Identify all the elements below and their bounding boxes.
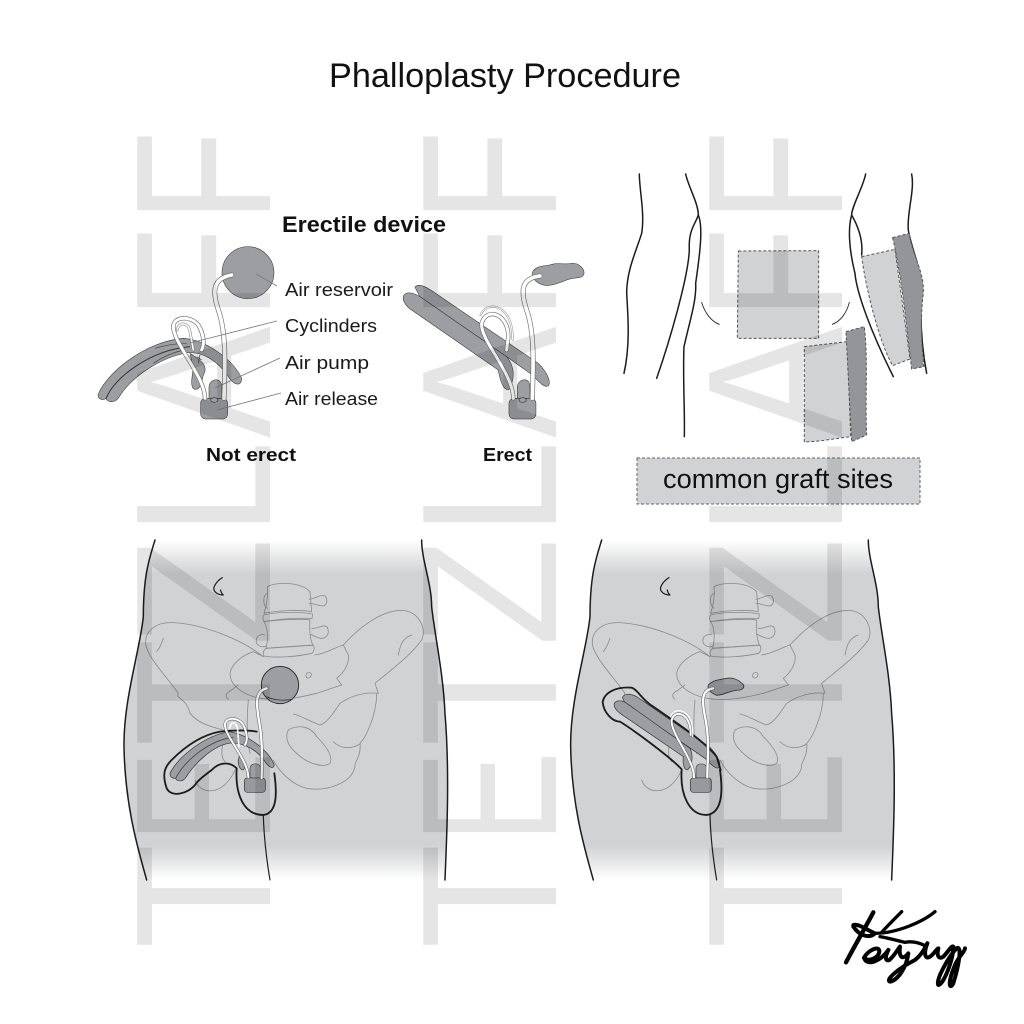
caption box: common graft sites — [663, 464, 893, 494]
panel: erectile device diagrams — [98, 212, 584, 465]
graft site: abdomen — [737, 251, 819, 338]
watermark: column 3: T — [668, 844, 883, 949]
heading: erectile device: Erectile device — [282, 212, 446, 237]
watermark: column 1 — [95, 131, 312, 949]
watermark: column 2: E — [381, 751, 597, 843]
watermark: column 3: E — [667, 751, 883, 843]
cylinder leg — [238, 753, 245, 770]
label: air release: Air release — [285, 389, 378, 409]
watermark: column 3: L — [668, 441, 883, 536]
graft site: upper arm — [862, 233, 924, 369]
release — [244, 778, 265, 792]
label: not erect: Not erect — [206, 444, 296, 465]
reservoir — [261, 666, 299, 704]
watermark: column 2: F — [381, 131, 597, 222]
watermark: column 3: T — [668, 638, 884, 747]
skin outline — [603, 688, 721, 815]
watermark: column 2: A — [382, 326, 598, 438]
graft site: lower forearm — [804, 327, 867, 442]
watermark: column 1: F — [95, 131, 311, 222]
tubes — [225, 688, 267, 778]
watermark: column 2: F — [381, 228, 597, 319]
tubes — [671, 688, 713, 777]
panel: common graft sites — [624, 174, 927, 504]
signature — [846, 912, 965, 986]
caption box — [637, 458, 920, 504]
watermark: column 2: T — [382, 638, 598, 747]
label: air reservoir: Air reservoir — [285, 280, 393, 300]
pump — [250, 764, 261, 781]
watermark: column 1: Z — [96, 538, 312, 646]
panel: pelvis with device, not erect — [124, 540, 448, 880]
leader lines — [190, 274, 281, 410]
device: erect — [403, 263, 584, 419]
cylinders — [170, 732, 274, 781]
panel: pelvis with device, erect — [571, 540, 894, 880]
title: Phalloplasty Procedure — [329, 57, 681, 95]
reservoir — [708, 678, 744, 695]
watermark: column 3: F — [667, 131, 883, 222]
release — [690, 778, 711, 792]
device: not erect — [98, 247, 274, 419]
label: erect: Erect — [483, 444, 532, 465]
cylinders — [614, 694, 720, 770]
watermark: column 2 — [381, 131, 598, 949]
watermark: column 1: T — [96, 638, 312, 747]
watermark: column 3: A — [668, 326, 884, 438]
label: air pump: Air pump — [285, 353, 369, 373]
watermark: column 1: L — [96, 441, 311, 536]
watermark: column 1: A — [96, 326, 312, 438]
torso outlines — [624, 174, 927, 437]
watermark: column 3 — [667, 131, 884, 949]
label: cylinders: Cyclinders — [285, 316, 377, 336]
watermark: column 1: F — [95, 228, 311, 319]
watermark: column 1: E — [95, 751, 311, 843]
watermark: column 3: Z — [668, 538, 884, 646]
watermark: column 2: L — [382, 441, 597, 536]
watermark: column 3: F — [667, 228, 883, 319]
watermark: column 2: Z — [382, 538, 598, 646]
watermark: column 2: T — [382, 844, 597, 949]
pump — [696, 764, 707, 781]
skin outline — [164, 730, 276, 815]
watermark: column 1: T — [96, 844, 311, 949]
